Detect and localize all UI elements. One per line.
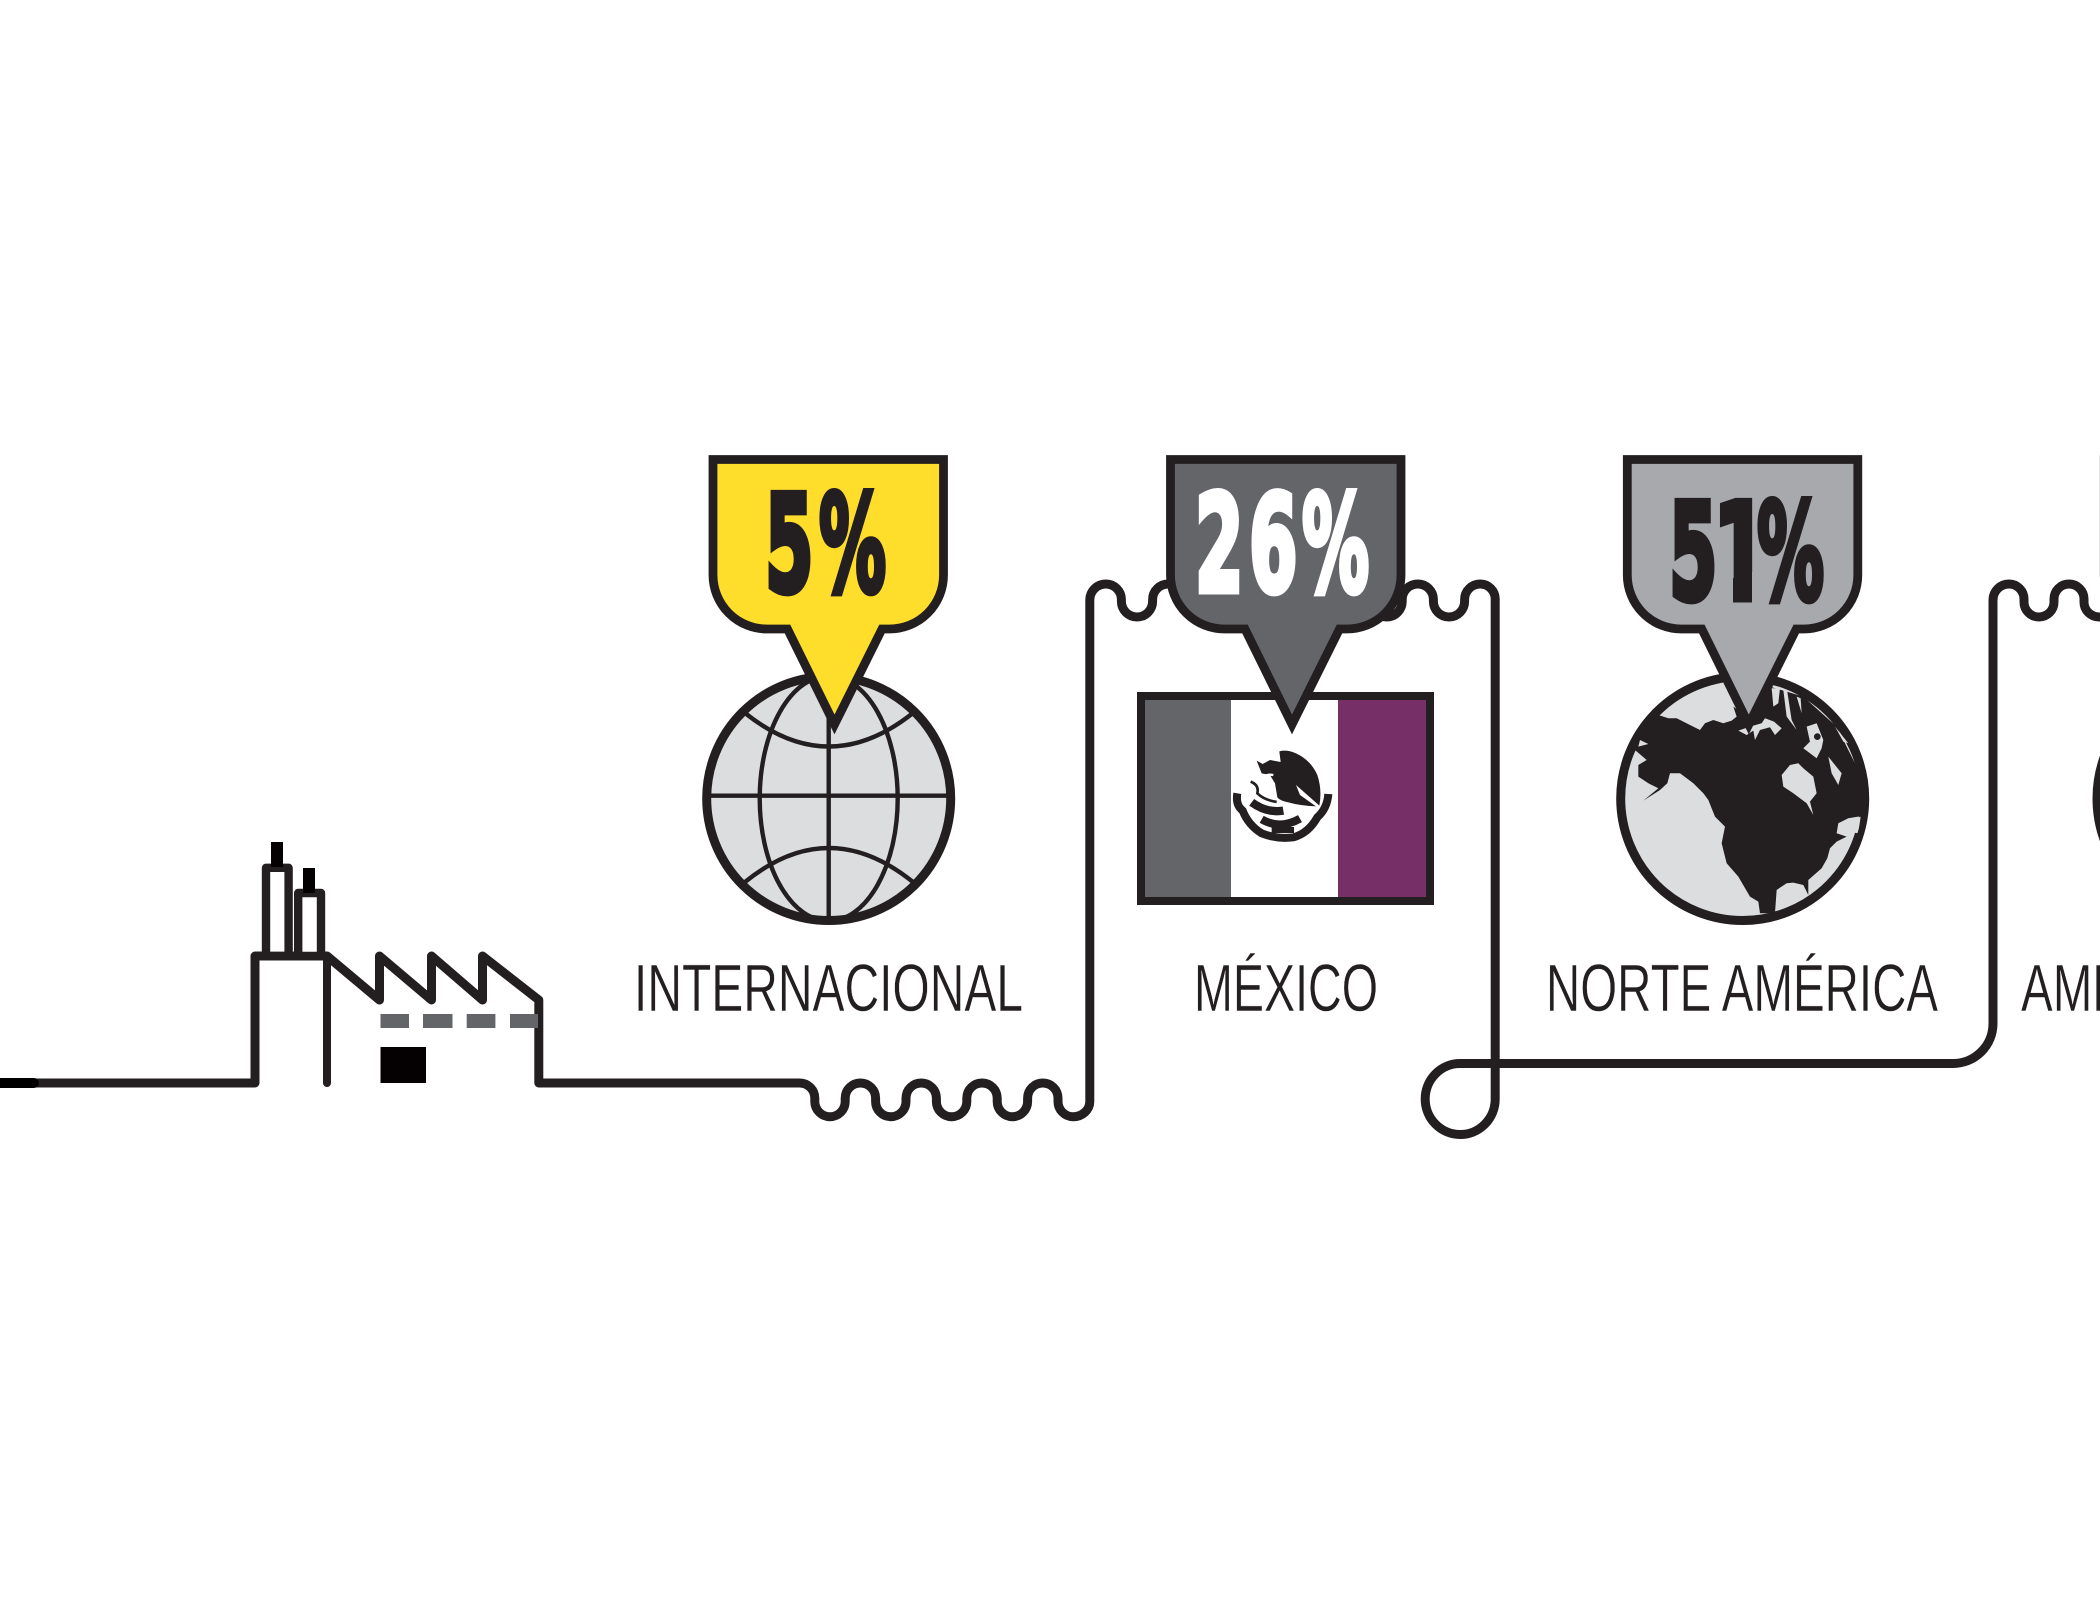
value 5% [765, 467, 886, 624]
pin: international 5% [713, 460, 944, 724]
value 26% [1195, 467, 1369, 624]
icon: North America globe [1621, 676, 1867, 920]
route line: continuous line with factory outline, waves and loop [0, 584, 2100, 1134]
pin: North America 51% [1627, 460, 1858, 724]
short chimney [298, 868, 321, 956]
value 51% [1669, 475, 1824, 632]
value 5%: 5 [765, 468, 813, 624]
label: MÉXICO: MÉXICO [1194, 951, 1378, 1026]
value 5%: % [819, 467, 886, 623]
tall chimney [266, 842, 289, 956]
value 51%: 5 [1669, 476, 1717, 632]
label: INTERNACIONAL: INTERNACIONAL [634, 951, 1023, 1026]
value 51%: % [1757, 475, 1824, 631]
North America landmass [1630, 687, 1867, 913]
value 26%: 2 [1195, 468, 1243, 624]
icon: mexican flag [1141, 696, 1430, 901]
icon: world globe [706, 676, 951, 921]
icon: cropped globe at right edge [2097, 676, 2100, 920]
pin: Mexico 26% [1170, 460, 1401, 724]
Hudson Bay [1782, 763, 1817, 815]
icon: factory [266, 842, 538, 1083]
label: NORTE AMÉRICA: NORTE AMÉRICA [1546, 951, 1938, 1026]
value 51%: 1 [1713, 475, 1769, 632]
factory door [380, 1047, 426, 1083]
factory inner wall [323, 956, 331, 1083]
line start cap [0, 1078, 34, 1088]
value 26%: % [1302, 467, 1369, 623]
value 26%: 6 [1249, 468, 1297, 624]
flag emblem [1237, 751, 1328, 838]
factory windows [380, 1014, 538, 1028]
